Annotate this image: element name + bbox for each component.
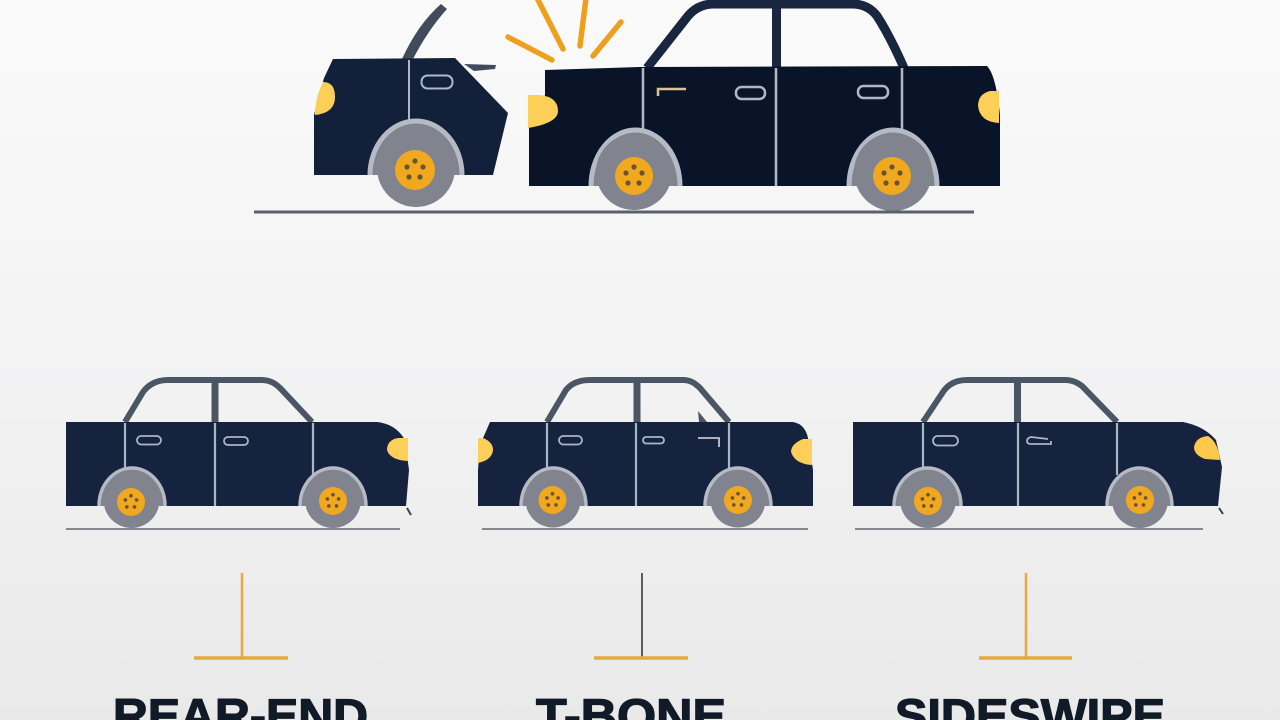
connector: rear-end	[194, 573, 288, 658]
headlight	[1194, 436, 1220, 460]
connector: t-bone	[594, 573, 688, 658]
window shard	[698, 411, 707, 422]
door seams	[923, 423, 1117, 506]
impact spark lines	[508, 0, 621, 60]
body	[529, 66, 1000, 186]
struck car front fragment	[314, 4, 508, 207]
roof frame	[547, 380, 729, 422]
body	[478, 422, 813, 506]
ground line	[66, 528, 400, 530]
door handle	[422, 76, 452, 88]
ground line	[254, 210, 974, 214]
small door mark	[698, 438, 719, 447]
rear wheel	[849, 130, 937, 211]
front headlight	[528, 95, 558, 128]
body	[853, 422, 1222, 506]
roof frame	[923, 380, 1117, 422]
roof frame	[125, 380, 312, 422]
headlight	[387, 438, 408, 461]
rear wheel	[99, 468, 165, 528]
rear light	[978, 91, 999, 123]
ground line	[855, 528, 1203, 530]
door handles	[137, 436, 248, 445]
centre pillar	[634, 380, 640, 423]
front wheel	[1107, 468, 1172, 528]
damage mark	[407, 508, 411, 515]
centre pillar	[772, 4, 781, 68]
headlight	[315, 82, 335, 115]
centre pillar	[212, 380, 218, 423]
front wheel	[300, 468, 366, 528]
door handles	[933, 436, 1051, 446]
door handles	[736, 86, 888, 99]
rear wheel	[894, 468, 961, 528]
headlight	[791, 439, 812, 465]
centre pillar	[1014, 380, 1021, 423]
damage mark	[1219, 508, 1223, 514]
rear wheel	[521, 468, 586, 528]
broken trim shard	[464, 64, 496, 71]
front body	[314, 58, 508, 175]
door seams	[547, 423, 729, 506]
body	[66, 422, 409, 506]
panel: rear-end car	[66, 380, 411, 529]
illustration: collision between two cars	[254, 0, 1000, 212]
roof frame	[647, 4, 904, 68]
ground line	[482, 528, 808, 530]
door handles	[559, 436, 664, 444]
door seams	[125, 423, 313, 506]
door seam	[408, 60, 410, 125]
raised hood panel	[402, 4, 447, 59]
door seams	[643, 68, 902, 186]
panel: sideswipe car	[853, 380, 1223, 529]
rear light	[478, 438, 493, 463]
wheel and arch	[370, 121, 462, 207]
panel: t-bone car	[478, 380, 813, 529]
striking car	[528, 4, 1000, 211]
front wheel	[705, 468, 771, 528]
connector: sideswipe	[979, 573, 1072, 658]
small door mark	[658, 89, 686, 96]
front wheel	[591, 130, 680, 210]
